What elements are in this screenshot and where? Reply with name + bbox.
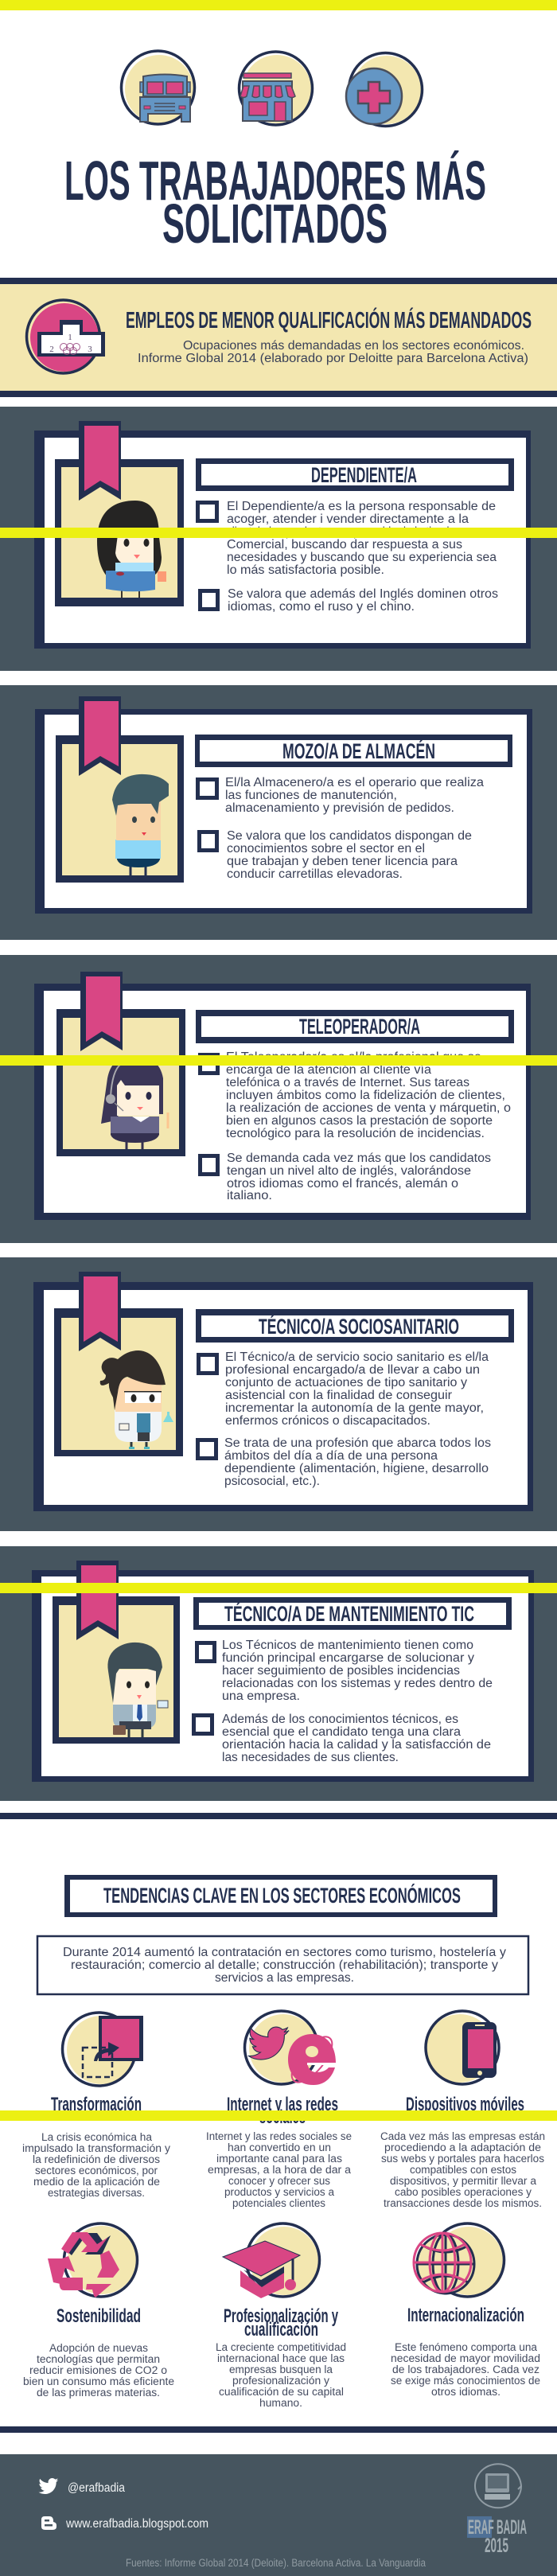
bullet 2: conducir carretillas elevadoras. [227, 867, 403, 881]
bullet 1 [198, 1050, 511, 1140]
text: La creciente competitividad [216, 2341, 346, 2353]
text: profesionalización y [232, 2375, 329, 2387]
heading: mozo: MOZO/A DE ALMACÉN [282, 739, 435, 763]
bullet 1: clientela los productos, responsable de la tienda [227, 525, 455, 539]
bullet 2: Se demanda cada vez más que los candidatos [227, 1152, 491, 1165]
bullet 1: El/la Almacenero/a es el operario que realiza [225, 776, 484, 789]
bullet 2: las necesidades de sus clientes. [222, 1751, 399, 1764]
heading: cualificación [244, 2319, 318, 2340]
panel: tecnico de mantenimiento [0, 1546, 557, 1801]
bullet 2 [196, 1436, 491, 1488]
title [64, 150, 486, 255]
bookmark [79, 421, 121, 501]
text: Este fenómeno comporta una [395, 2341, 537, 2353]
bullet 1 [197, 1350, 489, 1428]
text: han convertido en un [228, 2141, 331, 2153]
bullet 2: orientación hacia la calidad y la satisfacción de [222, 1738, 491, 1752]
text: section description [138, 339, 528, 365]
text: sources: Fuentes: Informe Global 2014 (Deloite). Barcelona Activa. La Vanguardia [126, 2557, 426, 2569]
text: importante canal para las [216, 2153, 342, 2165]
trend: internacionalizacion [391, 2223, 540, 2398]
bullet 1: una empresa. [222, 1689, 300, 1703]
heading: teleoperador [196, 1010, 514, 1043]
text: twitter handle: @erafbadia [68, 2481, 125, 2495]
bullet 1 [195, 1639, 493, 1703]
bullet 1: incrementar la autonomía de la gente mayor, [225, 1401, 484, 1415]
text [23, 2342, 174, 2399]
bullet 1: las funciones de manutención, [225, 789, 397, 802]
text [22, 2131, 170, 2199]
text: compatibles con estos [410, 2164, 516, 2176]
text: de las primeras materias. [37, 2387, 160, 2399]
text: blog url: www.erafbadia.blogspot.com [65, 2517, 208, 2531]
bullet 2 [198, 587, 498, 614]
panel: dependiente [0, 407, 557, 671]
text box: 2014 hiring: servicios a las empresas. [215, 1971, 354, 1985]
text: internacional hace que las [217, 2352, 345, 2364]
panel: footer [0, 2454, 557, 2576]
text: Adopción de nuevas [49, 2342, 148, 2354]
text: procediendo a la adaptación de [384, 2141, 541, 2153]
icon: twitter and browser [245, 2011, 339, 2088]
icon: warehouse worker [112, 774, 169, 875]
heading: sociales [259, 2106, 306, 2128]
bullet 1: relacionadas con los sistemas y redes dentro de [222, 1677, 493, 1690]
trend: sostenibilidad [23, 2223, 174, 2399]
bullet 2: conocimientos sobre el sector en el [227, 842, 425, 855]
bullet 2: ámbitos del día a día de una persona [224, 1449, 438, 1463]
heading: tecnico de mantenimiento [193, 1597, 512, 1630]
bullet 1: necesidades y buscando que su experiencia sea [227, 551, 497, 564]
heading [224, 2305, 338, 2340]
icon: podium: 1 [68, 333, 72, 342]
icon: medical cross [346, 53, 422, 126]
panel: teleoperador [0, 955, 557, 1243]
bullet 1: incluyen ámbitos como la fidelización de clientes, [226, 1089, 505, 1102]
bullet 1: Los Técnicos de mantenimiento tienen como [222, 1639, 473, 1652]
bullet 1: hacer seguimiento de posibles incidencias [222, 1664, 460, 1678]
icon: IT technician [107, 1643, 168, 1737]
heading: tendencias clave [64, 1875, 497, 1917]
bullet 1: bien en algunos casos la prestación de soporte [226, 1114, 493, 1128]
trend: internet [206, 2011, 352, 2209]
bullet 1 [196, 500, 497, 577]
trend: transformacion [22, 2013, 170, 2199]
text: de los trabajadores. Cada vez [392, 2364, 539, 2375]
heading: dependiente [196, 458, 514, 491]
text: sectores económicos, por [35, 2165, 158, 2177]
heading: Internet y las redes [227, 2094, 338, 2115]
text: estrategias diversas. [48, 2187, 145, 2199]
bookmark [79, 1272, 121, 1351]
icon: transformation [62, 2013, 143, 2086]
text [216, 2341, 346, 2409]
bullet 1: encarga de la atención al cliente vía [226, 1063, 431, 1077]
bullet 2: otros idiomas como el francés, alemán o [227, 1177, 458, 1191]
bullet 1: lo más satisfactoria posible. [227, 563, 384, 577]
text: impulsado la transformación y [22, 2142, 170, 2154]
bullet 1: asistencial con la finalidad de conseguir [225, 1389, 452, 1402]
icon: twitter [38, 2478, 58, 2494]
icon: bus [121, 51, 194, 124]
bookmark [80, 972, 123, 1051]
bullet 2 [192, 1713, 491, 1764]
icon: lab technician [100, 1350, 173, 1449]
text: reducir emisiones de CO2 o [29, 2364, 167, 2376]
bullet 1: la realización de acciones de venta y márquetin, o [226, 1101, 511, 1115]
bullet 2: tengan un nivel alto de inglés, valorándose [227, 1164, 471, 1178]
text [206, 2130, 352, 2209]
text: transacciones desde los mismos. [384, 2197, 542, 2209]
icon: call-centre agent [101, 1055, 168, 1149]
text: sus webs y portales para hacerlos [381, 2153, 544, 2165]
bullet 1: tecnológico para la resolución de incidencias. [226, 1127, 485, 1140]
text: bien un consumo más eficiente [23, 2375, 174, 2387]
text: La crisis económica ha [41, 2131, 152, 2143]
bullet 2: Se valora que además del Inglés dominen otros [228, 587, 498, 601]
text: Internet y las redes sociales se [206, 2130, 352, 2142]
text box: 2014 hiring [37, 1936, 528, 1994]
text box: 2014 hiring: restauración; comercio al detalle; construcción (rehabilitación); transporte y [71, 1958, 498, 1972]
bullet 2: dependiente (alimentación, higiene, desarrollo [224, 1462, 489, 1475]
logo: eraf badia: 2015 [485, 2535, 508, 2557]
text: humano. [259, 2397, 302, 2409]
bullet 2: italiano. [227, 1189, 272, 1202]
text: conocer y ofrecer sus [228, 2175, 330, 2187]
picture frame [54, 1308, 183, 1456]
picture frame [53, 1596, 180, 1744]
panel: tecnico sociosanitario [0, 1257, 557, 1531]
text: la redefinición de diversos [33, 2153, 160, 2165]
bullet 1: El Técnico/a de servicio socio sanitario es el/la [225, 1350, 489, 1364]
bullet 1: función principal encargarse de solucionar y [222, 1651, 474, 1665]
bullet 1: Comercial, buscando dar respuesta a sus [227, 538, 462, 551]
bullet 1: telefónica o a través de Internet. Sus tareas [226, 1076, 469, 1089]
panel: mozo de almacen [0, 685, 557, 940]
text: empresas, a la hora de dar a [208, 2164, 352, 2176]
icon: recycle [48, 2223, 137, 2297]
text: otros idiomas. [431, 2386, 501, 2398]
icon: smartphone [426, 2011, 499, 2084]
icon: blogger [41, 2516, 56, 2530]
bullet 1: El Dependiente/a es la persona responsable de [227, 500, 496, 513]
trend: dispositivos [380, 2011, 545, 2209]
picture frame [55, 459, 184, 606]
bullet 2: idiomas, como el ruso y el chino. [228, 600, 415, 614]
icon: shop [239, 52, 312, 125]
icon: podium: 3 [88, 345, 92, 354]
text: dispositivos, y permitir llevar a [390, 2175, 536, 2187]
icon: shop assistant [97, 501, 166, 598]
bullet 2: esencial que el candidato tenga una clara [222, 1725, 461, 1739]
text: cualificación de su capital [219, 2386, 344, 2398]
icon: podium [27, 300, 105, 373]
bullet 1: enfermos crónicos o discapacitados. [225, 1414, 430, 1428]
bullet 2: Se valora que los candidatos dispongan de [227, 829, 472, 843]
text: section description: Informe Global 2014 (elaborado por Deloitte para Barcelona Activa) [138, 352, 528, 365]
heading [227, 2094, 338, 2128]
text: cabo posibles operaciones y [395, 2186, 532, 2198]
heading: dependiente: DEPENDIENTE/A [311, 463, 417, 487]
text: necesidad de mayor movilidad [391, 2352, 540, 2364]
bullet 2 [198, 1152, 491, 1202]
text: se exige más conocimientos de [391, 2375, 540, 2387]
bullet 2: que trabajan y deben tener licencia para [227, 855, 458, 868]
heading: mozo [195, 735, 512, 767]
bookmark [76, 1561, 119, 1640]
title: SOLICITADOS [162, 193, 388, 255]
bookmark [79, 696, 121, 776]
bullet 2 [197, 829, 472, 881]
heading: Transformación [51, 2094, 142, 2115]
heading: teleoperador: TELEOPERADOR/A [299, 1015, 420, 1039]
bullet 1: almacenamiento y previsión de pedidos. [225, 801, 454, 815]
bullet 2: psicosocial, etc.). [224, 1475, 320, 1488]
bullet 1: acoger, atender i vender directamente a la [227, 512, 469, 526]
bullet 2: Además de los conocimientos técnicos, es [222, 1713, 458, 1726]
text: section description: Ocupaciones más demandadas en los sectores económicos. [183, 339, 524, 353]
text [380, 2130, 545, 2209]
heading: Profesionalización y [224, 2305, 338, 2327]
bullet 2: Se trata de una profesión que abarca todos los [224, 1436, 491, 1450]
text: medio de la aplicación de [33, 2176, 160, 2188]
bullet 1: El Teleoperador/a es el/la profesional que se [226, 1050, 481, 1064]
trend: profesionalizacion [216, 2223, 346, 2409]
bullet 1 [196, 776, 484, 815]
text: tecnologías que permitan [37, 2353, 160, 2365]
logo: eraf badia [467, 2464, 527, 2557]
icon: podium: 2 [49, 345, 54, 354]
text: potenciales clientes [232, 2197, 325, 2209]
picture frame [56, 1009, 185, 1156]
icon: graduation cap [223, 2223, 320, 2298]
picture frame [56, 735, 184, 883]
heading: tecnico sociosanitario [196, 1309, 514, 1343]
text: productos y servicios a [224, 2186, 334, 2198]
text: Cada vez más las empresas están [380, 2130, 545, 2142]
heading: Sostenibilidad [56, 2305, 141, 2327]
bullet 1: profesional encargado/a de llevar a cabo un [225, 1363, 480, 1377]
text box: 2014 hiring: Durante 2014 aumentó la contratación en sectores como turismo, hostelería y [63, 1946, 506, 1959]
text [391, 2341, 540, 2398]
bullet 1: conjunto de actuaciones de tipo sanitario y [225, 1376, 467, 1389]
icon: globe [414, 2223, 504, 2297]
text: empresas busquen la [229, 2364, 333, 2375]
panel: section header [0, 278, 557, 397]
